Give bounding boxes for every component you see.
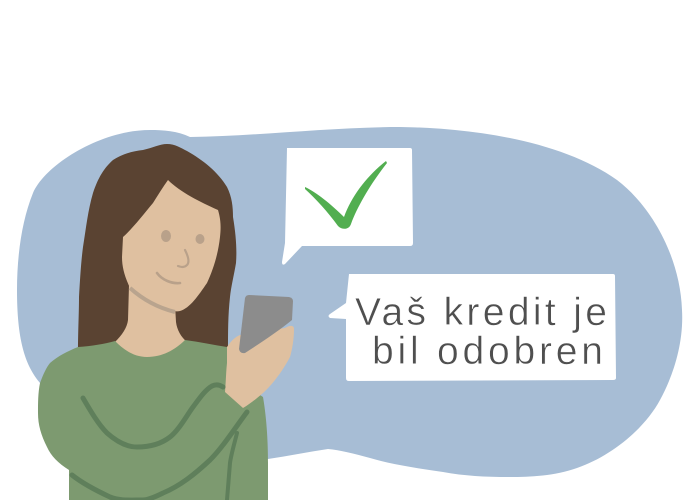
eyes [161,230,204,244]
green sweater [38,340,268,500]
jaw shadow [130,288,175,312]
speech bubble: credit approved message [328,274,616,381]
hair [78,144,236,352]
message text: Vaš kredit je [355,291,607,334]
speech bubble: checkmark [282,148,413,265]
smile [157,273,180,283]
neck [115,285,187,362]
woman with phone [38,144,294,500]
sleeve fold lines [72,385,247,500]
blue background blob [17,127,682,477]
phone [239,295,293,353]
nose [178,250,188,267]
message text: bil odobren [372,330,603,373]
icon: green checkmark [305,161,387,229]
face [122,180,221,311]
hand [225,326,294,408]
message text [355,291,607,373]
